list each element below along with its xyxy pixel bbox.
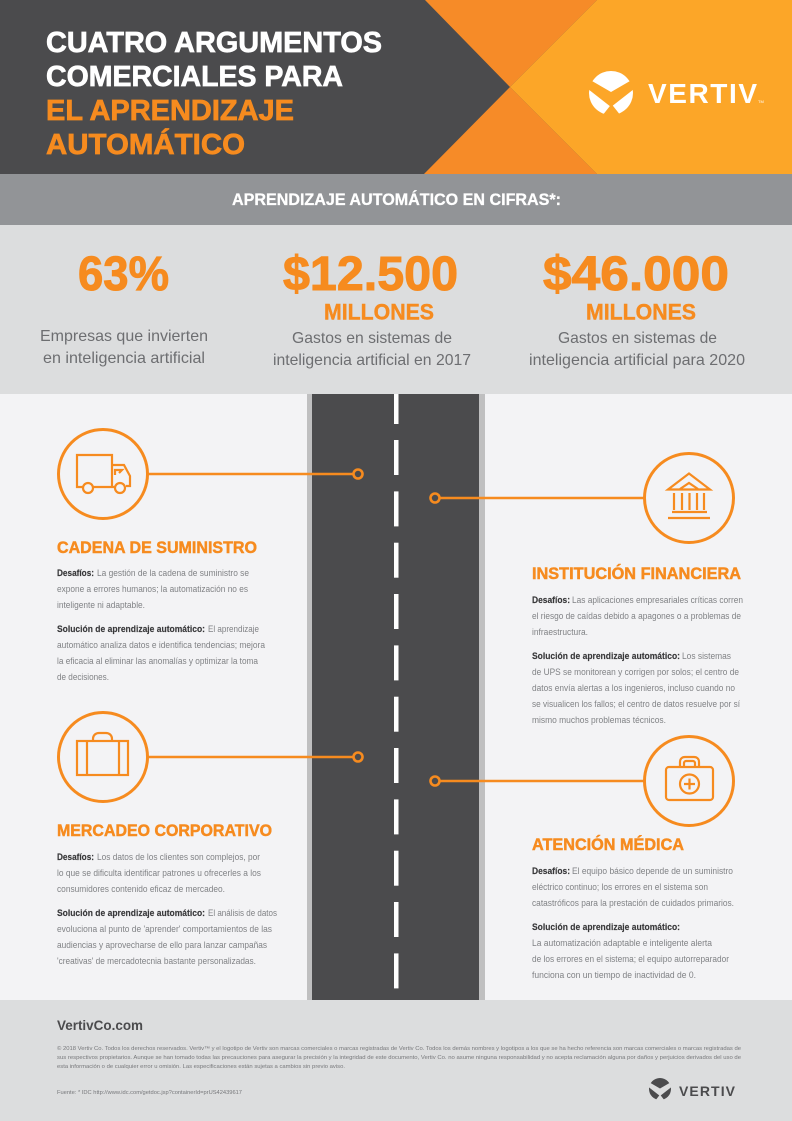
- legal text: © 2018 Vertiv Co. Todos los derechos reservados. Vertiv™ y el logotipo de Vertiv son marcas comerciales o marcas registradas de Vertiv Co. Todos los demás nombres y logotipos a los que se ha hecho referencia son marcas comerciales o marcas registradas de: [57, 1045, 741, 1052]
- text: cadena de suministro: de decisiones.: [57, 672, 109, 683]
- connector: financial: [430, 494, 644, 502]
- text: institución financiera: mismo muchos problemas técnicos.: [532, 715, 666, 726]
- text: cadena de suministro: [57, 568, 266, 683]
- text: atención médica: de los errores en el sistema; el equipo autorreparador: [532, 954, 730, 965]
- logo: Vertiv footer: [648, 1078, 736, 1101]
- text: cadena de suministro: automático analiza datos e identifica tendencias; mejora: [57, 640, 266, 651]
- text: mercadeo corporativo: lo que se dificulta identificar patrones u ofrecerles a los: [57, 868, 261, 879]
- logo: Vertiv header: [588, 71, 764, 116]
- text: mercadeo corporativo: Los datos de los clientes son complejos, por: [97, 852, 261, 863]
- text: atención médica: La automatización adaptable e inteligente alerta: [532, 938, 713, 949]
- text: mercadeo corporativo: El análisis de datos: [208, 908, 277, 919]
- legal text: esta información o de cualquier error u omisión. Las especificaciones están sujetas a cambios sin previo aviso.: [57, 1064, 345, 1070]
- text: atención médica: funciona con un tiempo de inactividad de 0.: [532, 970, 696, 981]
- stat: 63%: [40, 248, 208, 367]
- legal text: [57, 1045, 741, 1070]
- text: institución financiera: Los sistemas: [682, 651, 731, 662]
- heading: institución financiera: INSTITUCIÓN FINANCIERA: [532, 564, 741, 583]
- text: mercadeo corporativo: consumidores contenido eficaz de mercadeo.: [57, 884, 225, 895]
- text: atención médica: catastróficos para la prestación de cuidados primarios.: [532, 898, 734, 909]
- text: mercadeo corporativo: Solución de aprendizaje automático:: [57, 908, 205, 919]
- stat: $12.500 millones: [273, 248, 471, 369]
- title: COMERCIALES PARA: [46, 61, 343, 93]
- stat: $46.000 millones: Gastos en sistemas de: [558, 330, 717, 347]
- text: institución financiera: Las aplicaciones empresariales críticas corren: [572, 595, 743, 606]
- band: section heading: APRENDIZAJE AUTOMÁTICO EN CIFRAS*:: [232, 190, 561, 209]
- text: atención médica: Desafíos:: [532, 866, 570, 877]
- panel: cadena de suministro: [57, 430, 362, 683]
- legal text: sus respectivos propietarios. Aunque se han tomado todas las precauciones para asegurar la precisión y la integridad de este documento, Vertiv Co. no asume ninguna responsabilidad y no acepta reclamación alguna por daños y perjuicios derivados del uso de: [57, 1055, 741, 1061]
- text: institución financiera: el riesgo de caídas debido a apagones o a problemas de: [532, 611, 741, 622]
- text: institución financiera: se visualicen los fallos; el centro de datos resuelve por sí: [532, 699, 740, 710]
- text: cadena de suministro: inteligente ni adaptable.: [57, 600, 145, 611]
- text: institución financiera: Solución de aprendizaje automático:: [532, 651, 680, 662]
- text: mercadeo corporativo: audiencias y aprovecharse de ello para lanzar campañas: [57, 940, 267, 951]
- title: [46, 27, 382, 161]
- stat: $46.000 millones: MILLONES: [586, 300, 696, 324]
- stat: $12.500 millones: $12.500: [283, 248, 458, 301]
- title: AUTOMÁTICO: [46, 127, 245, 161]
- stat: $46.000 millones: $46.000: [543, 248, 729, 301]
- text: atención médica: El equipo básico depende de un suministro: [572, 866, 733, 877]
- stat: $46.000 millones: [529, 248, 745, 369]
- text: mercadeo corporativo: [57, 852, 277, 967]
- stat: 63%: en inteligencia artificial: [43, 350, 205, 367]
- text: institución financiera: [532, 595, 743, 726]
- text: institución financiera: datos envía alertas a los ingenieros, incluso cuando no: [532, 683, 735, 694]
- heading: mercadeo corporativo: MERCADEO CORPORATIVO: [57, 821, 272, 840]
- stat: $12.500 millones: inteligencia artificial en 2017: [273, 352, 471, 369]
- title: CUATRO ARGUMENTOS: [46, 27, 382, 59]
- stat: $46.000 millones: inteligencia artificial para 2020: [529, 352, 745, 369]
- connector: supply chain: [148, 470, 362, 478]
- title: EL APRENDIZAJE: [46, 95, 294, 127]
- stat: $12.500 millones: MILLONES: [324, 300, 434, 324]
- panel: footer: [0, 1000, 792, 1121]
- heading: atención médica: ATENCIÓN MÉDICA: [532, 835, 684, 854]
- logo: Vertiv header: TM: [758, 99, 764, 104]
- stat: $12.500 millones: Gastos en sistemas de: [292, 330, 452, 347]
- icon: bank: [644, 454, 734, 542]
- panel: mercadeo corporativo: [57, 712, 362, 967]
- icon: medical kit: [644, 736, 734, 826]
- text: mercadeo corporativo: evoluciona al punto de 'aprender' comportamientos de las: [57, 924, 272, 935]
- text: institución financiera: Desafíos:: [532, 595, 570, 606]
- heading: cadena de suministro: CADENA DE SUMINISTRO: [57, 538, 257, 557]
- connector: marketing: [148, 752, 362, 762]
- logo: Vertiv header: VERTIV: [648, 78, 757, 109]
- header banner: [0, 0, 792, 174]
- text: atención médica: [532, 866, 734, 981]
- text: cadena de suministro: Desafíos:: [57, 568, 94, 579]
- icon: truck: [58, 430, 148, 518]
- text: mercadeo corporativo: Desafíos:: [57, 852, 94, 863]
- text: atención médica: Solución de aprendizaje automático:: [532, 922, 680, 933]
- text: mercadeo corporativo: 'creativas' de mercadotecnia bastante personalizadas.: [57, 956, 256, 967]
- text: cadena de suministro: Solución de aprendizaje automático:: [57, 624, 205, 635]
- text: cadena de suministro: la eficacia al eliminar las anomalías y optimizar la toma: [57, 656, 259, 667]
- text: institución financiera: infraestructura.: [532, 627, 588, 638]
- panel: institución financiera: [430, 454, 743, 726]
- website: VertivCo.com: [57, 1018, 143, 1033]
- text: cadena de suministro: La gestión de la cadena de suministro se: [97, 568, 249, 579]
- connector: healthcare: [430, 776, 644, 786]
- stat: 63%: 63%: [78, 248, 169, 301]
- band: section heading: [0, 174, 792, 225]
- logo: Vertiv footer: VERTIV: [679, 1083, 736, 1099]
- stat: 63%: Empresas que invierten: [40, 328, 208, 345]
- panel: atención médica: [430, 736, 734, 981]
- text: cadena de suministro: El aprendizaje: [208, 624, 259, 635]
- source: Fuente: * IDC http://www.idc.com/getdoc.jsp?containerId=prUS42439617: [57, 1090, 242, 1096]
- text: institución financiera: de UPS se monitorean y corrigen por solos; el centro de: [532, 667, 739, 678]
- text: atención médica: eléctrico continuo; los errores en el sistema son: [532, 882, 708, 893]
- panel: statistics: [0, 225, 792, 394]
- road: [307, 394, 485, 1000]
- icon: briefcase: [58, 712, 148, 802]
- text: cadena de suministro: expone a errores humanos; la automatización no es: [57, 584, 248, 595]
